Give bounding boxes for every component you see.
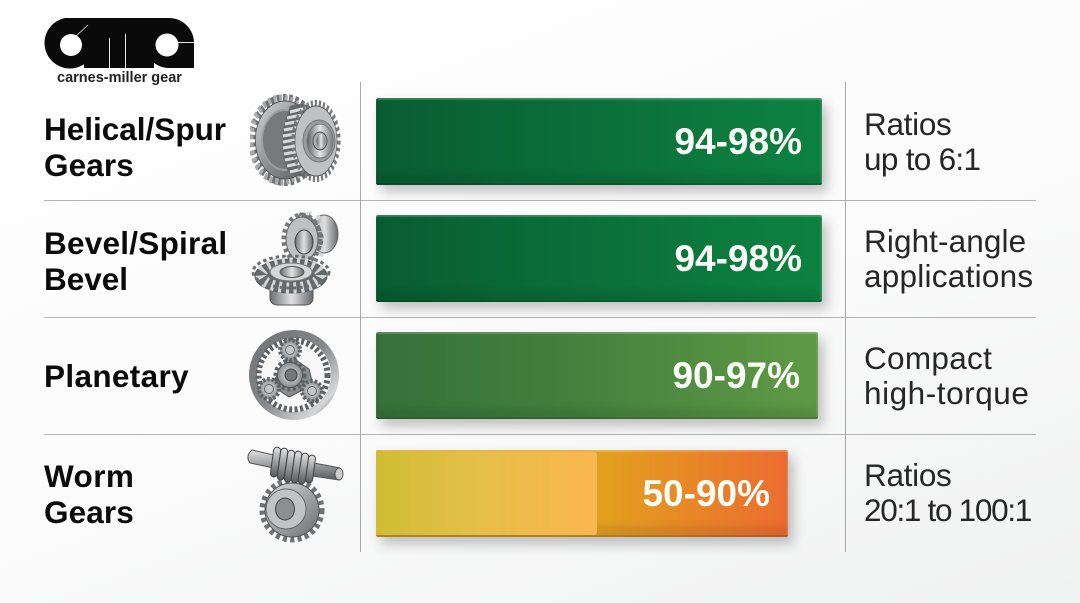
- bar: Helical/Spur efficiency: 94-98%: [674, 121, 802, 162]
- heading: Bevel/Spiral Bevel: Bevel/Spiral: [44, 225, 227, 261]
- note: Right-angle applications: Right-angle: [864, 223, 1026, 259]
- note: Compact high-torque: high-torque: [864, 375, 1029, 411]
- note: Ratios 20:1 to 100:1: 20:1 to 100:1: [864, 492, 1031, 528]
- logo: carnes-miller gear: [44, 18, 194, 86]
- logo: carnes-miller gear: carnes-miller gear: [57, 70, 182, 86]
- bar: Helical/Spur efficiency: [376, 98, 822, 185]
- value label: 50-90%: [642, 473, 770, 514]
- bar: Bevel/Spiral efficiency: [376, 215, 822, 302]
- note: Ratios 20:1 to 100:1: [864, 457, 1031, 528]
- heading: Helical/Spur Gears: [44, 111, 226, 183]
- bar: Bevel/Spiral efficiency: 94-98%: [674, 238, 802, 279]
- bar: Planetary efficiency: 90-97%: [672, 355, 800, 396]
- note: Right-angle applications: applications: [864, 258, 1033, 294]
- icon: helical and spur gears: [250, 94, 341, 186]
- note: Ratios up to 6:1: up to 6:1: [864, 141, 980, 177]
- heading: Bevel/Spiral Bevel: Bevel: [44, 261, 128, 297]
- note: Compact high-torque: Compact: [864, 340, 992, 376]
- heading: Helical/Spur Gears: Helical/Spur: [44, 111, 226, 147]
- note: Ratios 20:1 to 100:1: Ratios: [864, 457, 952, 493]
- heading: Planetary: Planetary: [44, 358, 189, 394]
- icon: bevel gears: [252, 212, 338, 306]
- note: Compact high-torque: [864, 340, 1029, 411]
- bar: Planetary efficiency: [376, 332, 818, 419]
- bar: Worm efficiency: [376, 450, 788, 537]
- heading: Worm Gears: Gears: [44, 494, 134, 530]
- icon: worm gear: [247, 446, 344, 542]
- heading: Worm Gears: [44, 458, 134, 530]
- icon: planetary gear set: [249, 330, 339, 420]
- heading: Helical/Spur Gears: Gears: [44, 147, 134, 183]
- note: Ratios up to 6:1: Ratios: [864, 106, 952, 142]
- heading: Worm Gears: Worm: [44, 458, 134, 494]
- note: Ratios up to 6:1: [864, 106, 980, 177]
- lower range overlay: [376, 452, 597, 535]
- note: Right-angle applications: [864, 223, 1033, 294]
- heading: Bevel/Spiral Bevel: [44, 225, 227, 297]
